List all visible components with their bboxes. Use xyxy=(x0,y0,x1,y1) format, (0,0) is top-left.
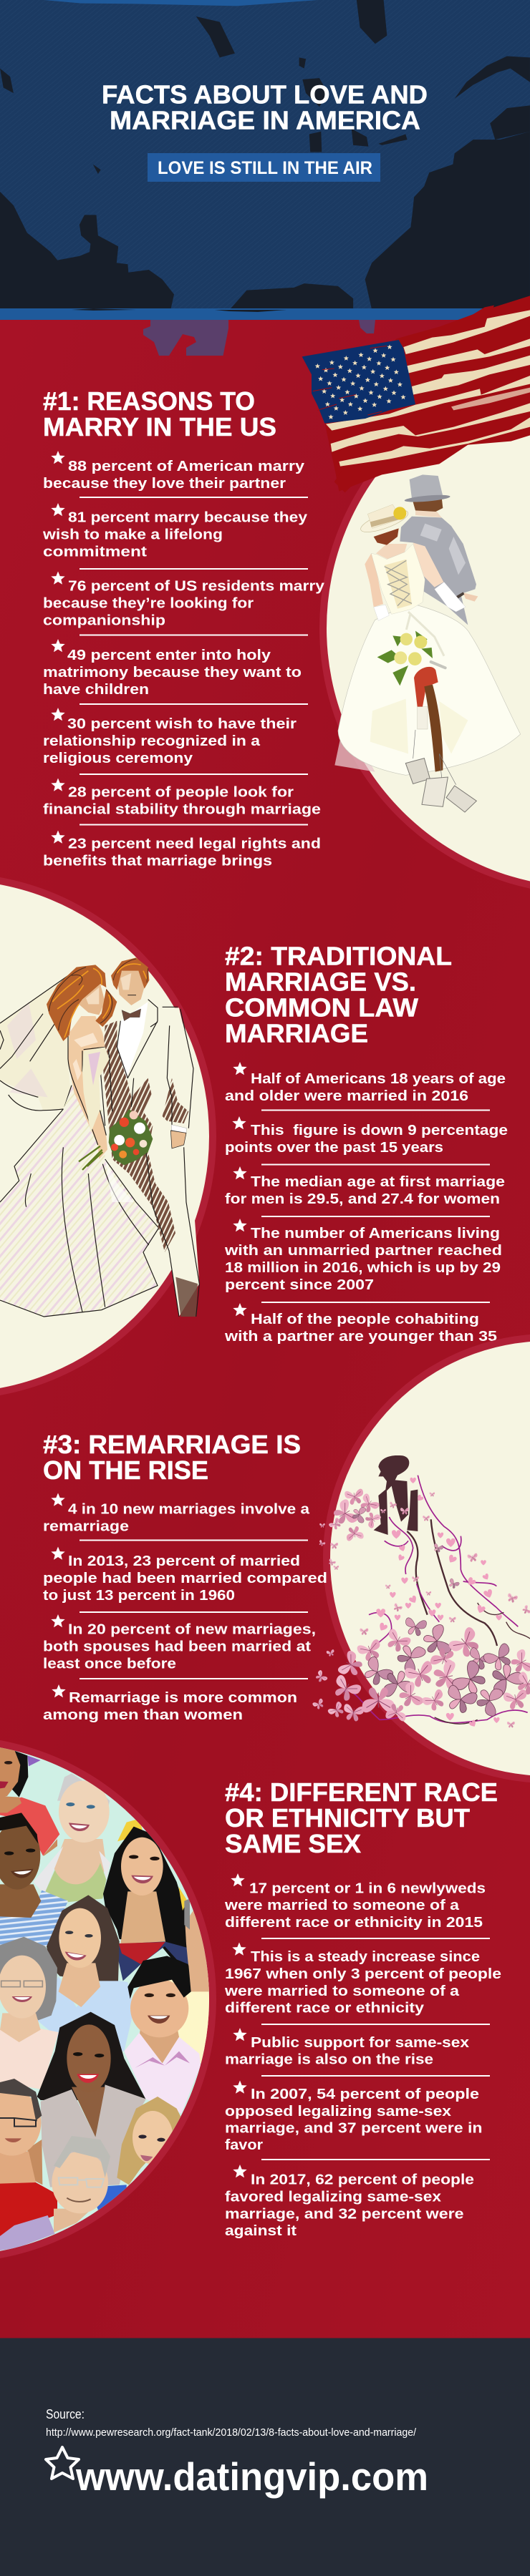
heading 4: #4: DIFFERENT RACE xyxy=(225,1777,498,1807)
fact: median age: The median age at first marriage xyxy=(251,1174,505,1190)
land shapes over red xyxy=(143,320,375,356)
fact: 2017: against it xyxy=(225,2223,297,2239)
fact: 23 percent xyxy=(43,830,321,869)
heading 2: MARRIAGE xyxy=(225,1019,368,1048)
panel: section 4 different race xyxy=(0,1736,501,2263)
shoulder cluster xyxy=(330,1498,359,1529)
panel: section 1 reasons to marry xyxy=(42,296,530,894)
fact: 30 percent: religious ceremony xyxy=(43,751,193,766)
fact: since 1967: This is a steady increase since xyxy=(251,1949,480,1965)
scattered butterflies on red xyxy=(319,1523,325,1528)
circle backdrop 3 xyxy=(323,1334,530,1783)
fact: cohabiting xyxy=(224,1303,497,1345)
fact: more common among men xyxy=(43,1684,297,1723)
fact: 88 percent xyxy=(43,451,308,498)
fact: since 1967: different race or ethnicity xyxy=(225,2001,425,2016)
subtitle ribbon: LOVE IS STILL IN THE AIR xyxy=(158,158,372,178)
bride silhouette xyxy=(374,1455,409,1535)
fact: unmarried partner: with an unmarried partner reached xyxy=(224,1243,502,1259)
person 7 grey hair lady xyxy=(0,1937,59,2089)
heading 3: #3: REMARRIAGE IS xyxy=(43,1430,301,1459)
heading 1 xyxy=(43,386,276,441)
fact: 20 percent: In 20 percent of new marriages, xyxy=(68,1621,316,1637)
panel: footer xyxy=(0,2338,530,2576)
fact: 4 in 10: 4 in 10 new marriages involve a xyxy=(68,1501,310,1517)
fact: 30 percent xyxy=(43,708,308,775)
fact: 17 percent: were married to someone of a xyxy=(224,1898,460,1913)
fact: 20 percent: both spouses had been married at xyxy=(43,1639,311,1654)
person 10 man with glasses xyxy=(0,2079,57,2236)
blue band xyxy=(0,308,530,320)
fact: 4 in 10 xyxy=(43,1493,310,1541)
fact: 49 percent: have children xyxy=(43,682,149,698)
person 11 older man xyxy=(0,2136,110,2250)
icon: American flag xyxy=(302,296,530,492)
heading 2: #2: TRADITIONAL xyxy=(225,942,452,970)
heading 2 xyxy=(225,942,452,1048)
fact: more common among men: Remarriage is more common xyxy=(69,1690,297,1706)
person 1 xyxy=(0,1746,59,1855)
fact: 20 percent: least once before xyxy=(43,1656,176,1672)
fact: half of Americans: Half of Americans 18 years of age xyxy=(251,1071,506,1087)
person 4 long black hair xyxy=(103,1819,197,1981)
fact: 2013: people had been married compared xyxy=(43,1571,327,1586)
fact: public support: Public support for same-sex xyxy=(251,2035,469,2051)
fact: more common among men: among men than women xyxy=(43,1707,243,1723)
fact: cohabiting: with a partner are younger than 35 xyxy=(224,1329,497,1345)
fact: 88 percent: 88 percent of American marry xyxy=(68,459,305,474)
fact: 2017 xyxy=(225,2165,474,2239)
heading 3: ON THE RISE xyxy=(43,1455,208,1485)
fact: 2007: In 2007, 54 percent of people xyxy=(251,2087,479,2102)
illustration: couple on bicycle xyxy=(334,474,521,812)
fact: 81 percent: commitment xyxy=(43,544,147,560)
fact: 17 percent: 17 percent or 1 in 6 newlyweds xyxy=(249,1880,486,1896)
fact: 2013: In 2013, 23 percent of married xyxy=(68,1553,300,1569)
fact: down 9 points: points over the past 15 years xyxy=(225,1140,443,1156)
fact: 76 percent: 76 percent of US residents marry xyxy=(68,578,325,594)
fact: 30 percent: 30 percent wish to have their xyxy=(67,716,297,732)
title: FACTS ABOUT LOVE AND xyxy=(102,80,428,109)
fact: 17 percent: different race or ethnicity in 2015 xyxy=(225,1915,483,1931)
flag canton with stars xyxy=(302,340,415,424)
fact: 81 percent xyxy=(42,503,308,570)
heading 4: OR ETHNICITY BUT xyxy=(225,1803,470,1833)
header panel: map of America xyxy=(0,0,530,356)
panel: section 2 traditional vs common law xyxy=(0,873,508,1400)
person 3 xyxy=(0,1813,68,1946)
fact: 2007: opposed legalizing same-sex xyxy=(225,2104,451,2119)
person 2 xyxy=(34,1773,110,1902)
person 9 woman in grey suit xyxy=(37,2012,146,2187)
fact: down 9 points: This figure is down 9 percentage xyxy=(251,1123,508,1138)
fact: median age: for men is 29.5, and 27.4 for women xyxy=(225,1191,500,1207)
heading 2: MARRIAGE VS. xyxy=(225,967,416,996)
fact: 2007: favor xyxy=(225,2137,263,2153)
fact: since 1967 xyxy=(224,1942,501,2025)
icon: outline star xyxy=(46,2447,79,2479)
fact: 30 percent: relationship recognized in a xyxy=(43,733,261,749)
fact: unmarried partner: percent since 2007 xyxy=(225,1277,374,1293)
fact: 76 percent xyxy=(43,571,325,635)
illustration: bride of butterflies xyxy=(312,1455,530,1728)
source label: Source: xyxy=(46,2407,85,2421)
fact: 23 percent: benefits that marriage brings xyxy=(43,853,272,869)
fact: 49 percent xyxy=(43,639,308,705)
fact: 2017: favored legalizing same-sex xyxy=(225,2190,441,2205)
circle backdrop 4 xyxy=(0,1736,216,2263)
circle backdrop 2 xyxy=(0,873,216,1400)
heading 4 xyxy=(225,1777,498,1858)
heading 1: MARRY IN THE US xyxy=(43,412,276,441)
illustration: diverse group of people xyxy=(0,1739,215,2254)
heading 3 xyxy=(43,1430,301,1485)
fact: 49 percent: matrimony because they want to xyxy=(43,665,302,680)
fact: down 9 points xyxy=(225,1116,508,1165)
circle backdrop 1 xyxy=(319,362,530,894)
veil butterflies xyxy=(430,1493,435,1496)
fact: unmarried partner: 18 million in 2016, which is up by 29 xyxy=(225,1260,501,1276)
fact: 81 percent: wish to make a lifelong xyxy=(42,527,223,542)
fact: 28 percent: financial stability through marriage xyxy=(43,801,321,817)
person 5 side figure xyxy=(185,1911,210,1991)
fact: half of Americans: and older were married in 2016 xyxy=(225,1088,468,1104)
fact: since 1967: were married to someone of a xyxy=(224,1984,460,1999)
page background xyxy=(0,320,530,2338)
fact: 2013: to just 13 percent in 1960 xyxy=(43,1588,235,1604)
website: www.datingvip.com xyxy=(75,2454,428,2499)
fact: 20 percent xyxy=(43,1614,316,1679)
fact: unmarried partner xyxy=(224,1219,502,1303)
fact: 49 percent: 49 percent enter into holy xyxy=(67,648,271,663)
person 6 brown hair woman xyxy=(37,1895,134,2051)
fact: 2013 xyxy=(43,1547,327,1613)
fact: 17 percent xyxy=(224,1873,490,1939)
person 12 blonde woman xyxy=(97,2097,183,2216)
fact: median age xyxy=(225,1166,505,1217)
fact: 76 percent: companionship xyxy=(43,613,165,628)
fact: 2007: marriage, and 37 percent were in xyxy=(225,2121,483,2137)
heading 2: COMMON LAW xyxy=(225,993,418,1022)
person 8 man black hair xyxy=(124,1956,201,2113)
fact: 2017: In 2017, 62 percent of people xyxy=(251,2172,474,2188)
fact: 23 percent: 23 percent need legal rights and xyxy=(68,836,321,852)
fact: cohabiting: Half of the people cohabiting xyxy=(251,1312,479,1327)
fact: 28 percent: 28 percent of people look for xyxy=(68,784,294,800)
fact: 88 percent: because they love their partner xyxy=(43,476,286,492)
fact: 81 percent: 81 percent marry because they xyxy=(68,509,308,525)
heading 1: #1: REASONS TO xyxy=(43,386,255,416)
fact: unmarried partner: The number of Americans living xyxy=(251,1226,500,1241)
fact: 76 percent: because they’re looking for xyxy=(43,595,254,611)
source url: http://www.pewresearch.org/fact-tank/2018/02/13/8-facts-about-love-and-marriage/ xyxy=(46,2427,417,2439)
title xyxy=(102,80,428,135)
fact: 28 percent xyxy=(43,779,321,826)
title: MARRIAGE IN AMERICA xyxy=(110,106,420,135)
panel: section 3 remarriage xyxy=(43,1334,530,1783)
illustration: bride and groom sketch xyxy=(0,957,199,1317)
heading 4: SAME SEX xyxy=(225,1829,361,1858)
fact: public support: marriage is also on the rise xyxy=(225,2052,433,2068)
fact: public support xyxy=(225,2028,490,2077)
fact: 2017: marriage, and 32 percent were xyxy=(225,2207,464,2223)
fact: 2007 xyxy=(225,2081,490,2160)
fact: 4 in 10: remarriage xyxy=(43,1518,129,1534)
subtitle ribbon xyxy=(148,153,380,182)
skirt butterflies xyxy=(404,1617,427,1636)
fact: since 1967: 1967 when only 3 percent of people xyxy=(225,1966,501,1982)
fact: half of Americans xyxy=(225,1062,506,1111)
